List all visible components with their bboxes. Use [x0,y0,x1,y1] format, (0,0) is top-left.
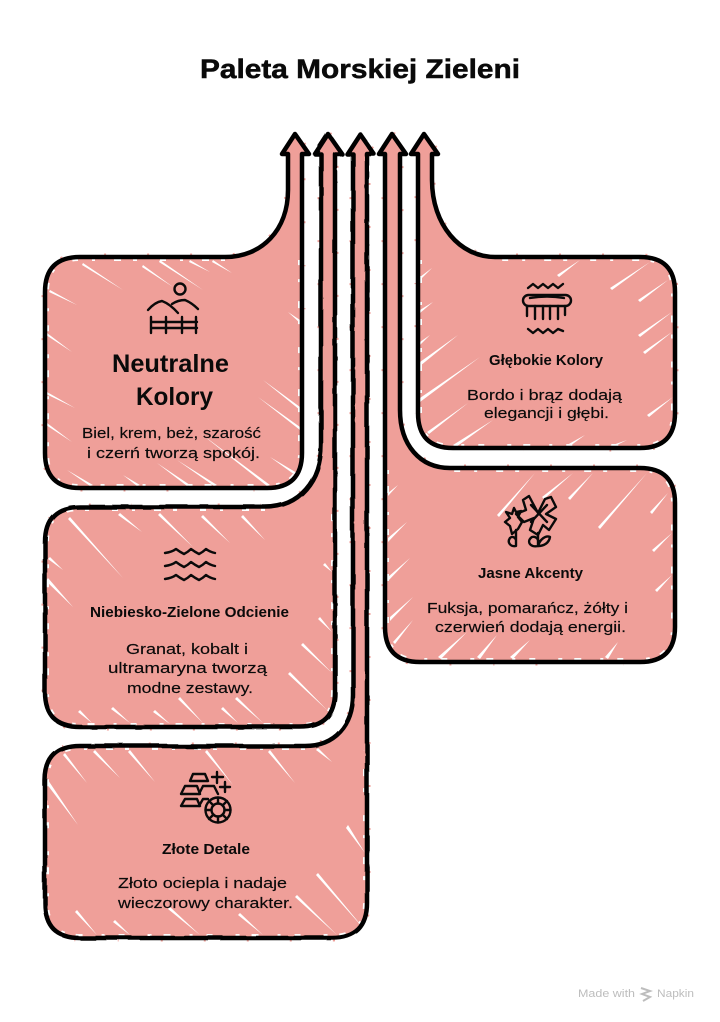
heading: Neutralne [112,350,229,378]
attribution [578,988,694,1001]
title: Paleta Morskiej Zieleni [200,54,520,84]
description: Fuksja, pomarańcz, żółty i [427,601,628,617]
description: czerwień dodają energii. [435,620,626,636]
description: modne zestawy. [127,681,253,697]
heading: Jasne Akcenty [478,565,584,582]
description [82,426,261,462]
heading [112,350,229,411]
description [117,876,293,912]
attribution: Made with [578,988,635,1000]
icon: gold bars and ring [181,772,230,822]
heading: Kolory [136,383,213,411]
icon: waves [165,549,215,580]
panel: Głębokie Kolory [411,134,675,448]
panel: Niebiesko-Zielone Odcienie [45,134,342,727]
description: Złoto ociepla i nadaje [118,876,287,892]
description: i czerń tworzą spokój. [87,446,260,462]
attribution: Napkin [657,988,694,1000]
description [427,601,628,636]
icon: landscape with fence [148,284,198,333]
description: Bordo i brąz dodają [467,388,623,404]
icon: flowers [505,496,556,546]
description: Biel, krem, beż, szarość [82,426,261,442]
heading: Niebiesko-Zielone Odcienie [90,604,289,621]
heading: Głębokie Kolory [489,352,604,369]
panel: Neutralne Kolory [45,134,309,488]
heading: Złote Detale [162,841,250,858]
panel: Jasne Akcenty [379,134,675,662]
description: wieczorowy charakter. [117,896,293,912]
description: Granat, kobalt i [126,642,248,658]
description: ultramaryna tworzą [108,661,268,677]
panel: Złote Detale [45,134,374,938]
icon: column capital [523,284,571,333]
description [467,388,623,422]
description: elegancji i głębi. [484,406,609,422]
description [108,642,268,697]
